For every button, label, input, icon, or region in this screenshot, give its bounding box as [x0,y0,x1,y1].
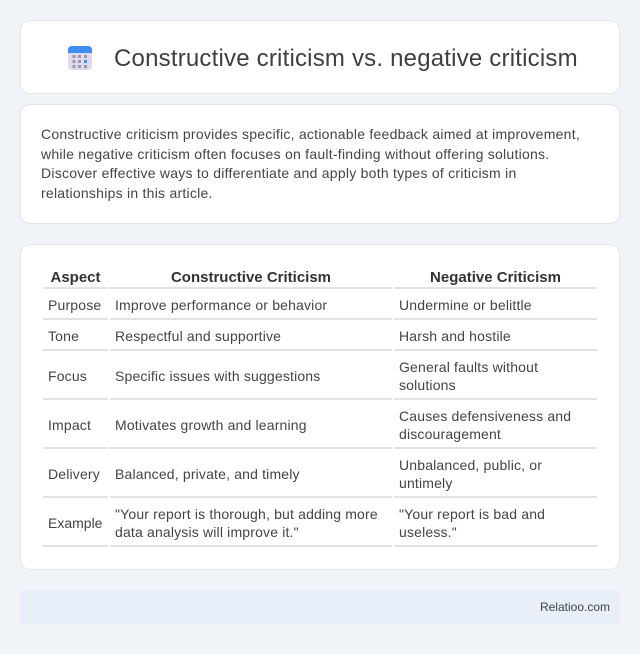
row: Delivery: untimely [399,475,452,491]
row: Example [48,506,545,540]
row: Tone: Harsh and hostile [399,328,511,344]
footer bar [20,590,620,624]
row: Purpose: Purpose [48,297,101,313]
row: Example: data analysis will improve it." [115,524,299,540]
row: Purpose [48,297,532,313]
panel: title card [20,20,620,94]
footer source text: Relatioo.com [540,600,610,614]
row: Delivery: Unbalanced, public, or [399,457,542,473]
intro text: Constructive criticism provides specific, actionable feedback aimed at improvement, [41,126,580,142]
title: Constructive criticism vs. negative criticism [114,45,578,72]
intro text: relationships in this article. [41,185,213,201]
panel: comparison table [20,244,620,570]
row: Tone: Respectful and supportive [115,328,281,344]
intro text [41,126,580,201]
row: Purpose: Undermine or belittle [399,297,532,313]
row: Example: useless." [399,524,457,540]
row: Focus [48,359,538,393]
row: Impact: Motivates growth and learning [115,417,307,433]
table header: Negative Criticism: Negative Criticism [430,269,561,286]
row: Example: "Your report is thorough, but adding more [115,506,378,522]
row: Delivery: Delivery [48,466,100,482]
row: Delivery [48,457,542,491]
row: Tone [48,328,511,344]
row: Impact: Impact [48,417,91,433]
table header: Constructive Criticism: Constructive Criticism [171,269,331,286]
row: Focus: General faults without [399,359,538,375]
intro text: Discover effective ways to differentiate and apply both types of criticism in [41,165,517,181]
icon: calendar [68,46,92,70]
panel: introduction [20,104,620,224]
row: Tone: Tone [48,328,79,344]
row: Focus: Specific issues with suggestions [115,368,320,384]
intro text: while negative criticism often focuses on fault-finding without offering solutions. [41,146,549,162]
row: Example: Example [48,515,102,531]
row: Example: "Your report is bad and [399,506,545,522]
row: Impact: Causes defensiveness and [399,408,571,424]
row: Delivery: Balanced, private, and timely [115,466,300,482]
row: Impact: discouragement [399,426,501,442]
row: Focus: Focus [48,368,87,384]
row: Purpose: Improve performance or behavior [115,297,327,313]
table header: Aspect: Aspect [50,269,101,286]
row: Impact [48,408,571,442]
row: Focus: solutions [399,377,456,393]
